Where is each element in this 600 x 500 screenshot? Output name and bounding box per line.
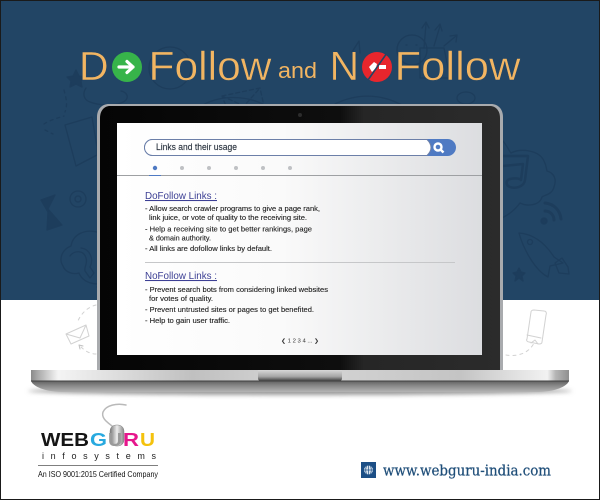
doodle: envelope centre — [222, 88, 264, 116]
logo subtitle: infosystems — [42, 451, 156, 461]
laptop notch — [258, 370, 342, 381]
dofollow list: - All links are dofollow links by default. — [145, 244, 272, 253]
doodle: cloud upper left — [84, 88, 127, 105]
dofollow list: - Allow search crawler programs to give a page rank, — [145, 204, 320, 213]
nofollow list — [145, 285, 328, 325]
nofollow heading: NoFollow Links : — [145, 270, 217, 282]
laptop base underside — [31, 380, 569, 392]
nofollow list: - Prevent search bots from considering linked websites — [145, 285, 328, 294]
logo — [38, 404, 159, 479]
tab dots — [153, 166, 292, 170]
laptop base deck — [31, 370, 569, 381]
doodle: rocket — [519, 233, 563, 277]
dofollow list: link juice, or vote of quality to the receiving site. — [149, 213, 307, 222]
nofollow list: for votes of quality. — [149, 294, 213, 303]
section divider — [145, 262, 455, 264]
doodles on white band — [66, 305, 546, 355]
laptop — [28, 104, 572, 395]
title word: N: N — [330, 43, 359, 89]
icon: globe — [361, 462, 376, 478]
title word: and: and — [278, 58, 317, 83]
doodle: tablet — [65, 117, 97, 166]
search bar — [144, 139, 456, 156]
website url: www.webguru-india.com — [383, 462, 551, 480]
icon: magnifier — [434, 144, 444, 152]
logo wordmark: R — [123, 430, 139, 450]
doodle: phone and dashed arrow — [527, 310, 546, 344]
icon: green arrow circle — [112, 52, 142, 82]
background doodles on navy band — [41, 22, 569, 287]
logo wordmark: G — [90, 430, 107, 450]
title — [79, 43, 521, 89]
pagination: ❮ 1 2 3 4 ... ❯ — [281, 338, 319, 344]
logo mouse cable — [103, 404, 126, 432]
doodle: dashed arc and envelope — [77, 305, 96, 354]
doodle: music cloud — [500, 141, 555, 219]
logo wordmark: U — [140, 430, 155, 450]
doodle: smiley head — [397, 35, 427, 65]
logo wordmark — [41, 430, 155, 450]
doodle: triangle near N — [352, 41, 360, 53]
doodle: idea cloud — [61, 231, 107, 287]
icon: red broken link circle — [362, 52, 392, 82]
dofollow heading: DoFollow Links : — [145, 190, 217, 202]
doodle: arrows up — [422, 22, 457, 48]
webcam — [298, 113, 302, 117]
doodle: arc behind laptop — [198, 96, 407, 108]
tab rule — [117, 174, 482, 176]
logo certification: An ISO 9001:2015 Certified Company — [38, 469, 159, 479]
doodle: star left — [67, 70, 85, 87]
title word: D: D — [79, 43, 109, 89]
doodle: box — [420, 48, 450, 78]
laptop screen — [117, 123, 482, 355]
laptop lid — [97, 104, 503, 370]
dofollow list — [145, 204, 320, 253]
website link — [361, 462, 551, 480]
dofollow list: & domain authority. — [149, 234, 211, 242]
laptop base shadow — [28, 387, 572, 395]
logo mouse — [110, 425, 124, 446]
doodle: lightbulb circle — [149, 47, 191, 89]
dofollow list: - Help a receiving site to get better rankings, page — [145, 224, 312, 234]
doodle: speech bubble — [457, 92, 475, 104]
title word: Follow: Follow — [148, 43, 272, 89]
logo wordmark: U — [108, 430, 122, 450]
search bar text: Links and their usage — [156, 142, 237, 153]
title word: Follow second: Follow — [394, 43, 521, 89]
doodle: dashed arc left — [44, 90, 67, 134]
logo wordmark: WEB — [41, 430, 89, 450]
doodle: hourglass — [41, 195, 62, 230]
doodle: small star — [513, 268, 525, 281]
doodle: at sign — [70, 191, 86, 207]
doodle: wifi — [545, 203, 561, 220]
nofollow list: - Help to gain user traffic. — [145, 316, 230, 325]
nofollow list: - Prevent untrusted sites or pages to get benefited. — [145, 305, 314, 314]
